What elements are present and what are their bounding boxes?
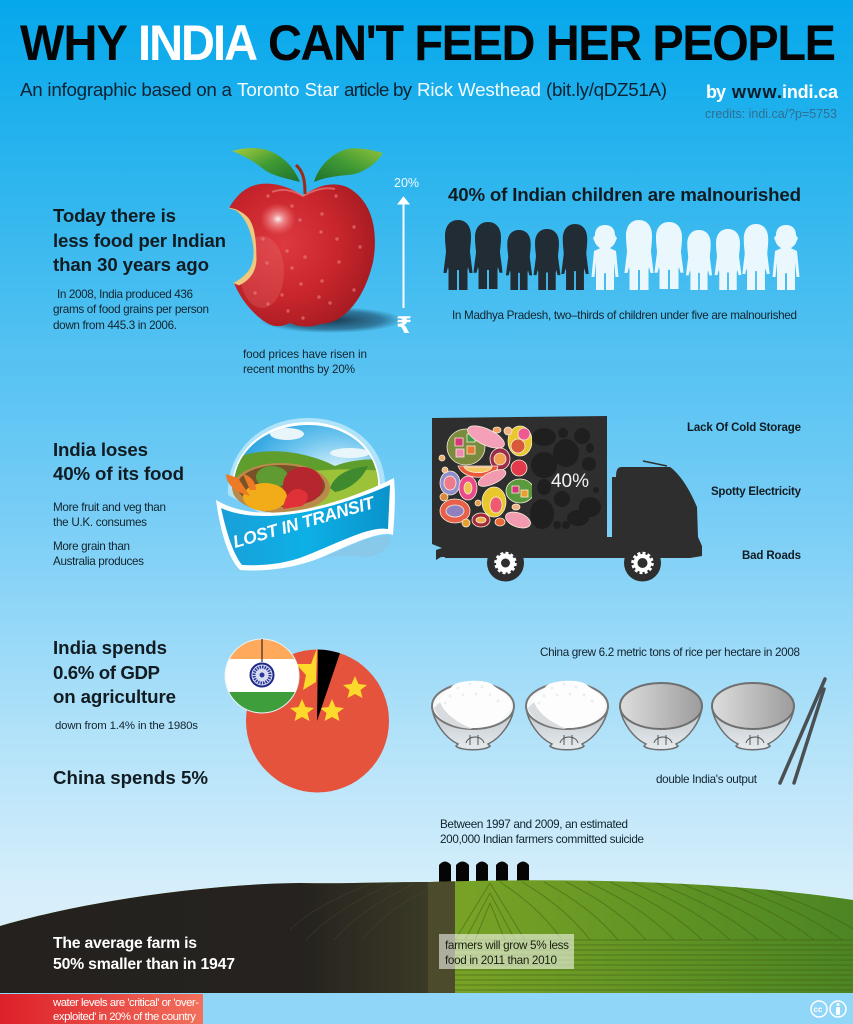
text: farmer suicides: Between 1997 and 2009, an estimated: [440, 818, 628, 831]
text: down from 1.4%: down from 1.4% in the 1980s: [55, 720, 198, 732]
text: Madhya Pradesh: In Madhya Pradesh, two–thirds of children under five are malnourished: [452, 309, 797, 322]
subtitle: [20, 79, 667, 100]
labels: causes: [687, 422, 802, 562]
icon: five grave markers: [439, 862, 529, 882]
byline: www.: [731, 82, 782, 102]
arrow: food price rise: ₹: [396, 313, 412, 339]
callout: water levels: exploited' in 20% of the country: [53, 1011, 196, 1023]
byline: indi.ca: [782, 82, 839, 102]
heading: GDP spending: India spends: [53, 637, 167, 658]
badge: lost in transit: LOST IN TRANSIT: [231, 492, 378, 552]
icon: empty bowl: [620, 683, 702, 750]
icon: bitten apple: [225, 148, 403, 333]
icon: chopsticks: [780, 679, 825, 783]
labels: causes: Lack Of Cold Storage: [687, 422, 801, 434]
text: farmer suicides: [440, 818, 644, 846]
fruit pattern: coloured half: [439, 421, 534, 531]
subtitle: Toronto Star: [237, 79, 339, 100]
text: losses compared: More fruit and veg than: [53, 501, 166, 514]
icon: rice bowl full: [526, 681, 608, 750]
icon: creative commons: [811, 1001, 846, 1017]
heading: less food: less food per Indian: [53, 230, 226, 251]
heading: GDP spending: [53, 637, 176, 707]
farmland hill: [0, 880, 853, 993]
text: losses compared: [53, 501, 166, 568]
text box: farmers will grow less: food in 2011 than 2010: [445, 954, 557, 967]
icon: empty bowl: [712, 683, 794, 750]
text: double output: double India's output: [656, 773, 758, 786]
heading: China spends: China spends 5%: [53, 767, 208, 788]
byline: by: [706, 82, 726, 102]
text: food grains: In 2008, India produced 436: [57, 288, 193, 301]
heading: India loses: India loses: [53, 439, 148, 460]
heading: GDP spending: on agriculture: [53, 686, 176, 707]
text: food prices: food prices have risen in: [243, 348, 367, 361]
heading: less food: than 30 years ago: [53, 254, 209, 275]
heading: less food: Today there is: [53, 205, 176, 226]
icon: creative commons: cc: [814, 1005, 823, 1014]
chart: China flag pie: [246, 648, 389, 792]
text: losses compared: Australia produces: [53, 555, 144, 568]
text: food grains: down from 445.3 in 2006.: [53, 319, 177, 332]
text: food prices: recent months by 20%: [243, 363, 355, 376]
text: food grains: grams of food grains per person: [53, 303, 209, 316]
labels: causes: Bad Roads: [742, 550, 801, 562]
callout: water levels: water levels are 'critical' or 'over-: [52, 997, 199, 1009]
text: losses compared: More grain than: [53, 540, 130, 553]
icon: rice bowl full: [432, 681, 514, 750]
subtitle: An infographic based on a: [20, 79, 233, 100]
title: CAN'T FEED HER PEOPLE: [268, 16, 836, 71]
text box: farmers will grow less: farmers will grow 5% less: [445, 939, 569, 952]
text box: farmers will grow less: [439, 934, 574, 969]
footer band: [0, 993, 853, 1024]
heading: GDP spending: 0.6% of GDP: [53, 662, 160, 683]
badge: lost in transit: [216, 418, 395, 570]
text: farmer suicides: 200,000 Indian farmers committed suicide: [440, 833, 644, 846]
byline: [706, 82, 839, 102]
text: average farm: [53, 935, 235, 973]
text: losses compared: the U.K. consumes: [53, 516, 147, 529]
heading: India loses: 40% of its food: [53, 463, 184, 484]
subtitle: (bit.ly/qDZ51A): [546, 79, 667, 100]
text: average farm: 50% smaller than in 1947: [53, 956, 235, 973]
callout: water levels: [0, 994, 203, 1024]
text: food grains: [53, 288, 209, 332]
title: [20, 16, 836, 71]
credits: credits: indi.ca/?p=5753: [705, 107, 837, 121]
title: INDIA: [138, 16, 258, 71]
fruit pattern: dark half: [530, 428, 601, 529]
icon: truck with food: 40%: [551, 471, 589, 492]
text: average farm: The average farm is: [53, 935, 197, 952]
arrow: food price rise: 20%: [394, 176, 419, 190]
text: food prices: [243, 348, 367, 376]
arrow: food price rise: [394, 176, 419, 339]
title: WHY: [20, 16, 128, 71]
subtitle: Rick Westhead: [417, 79, 541, 100]
heading: India loses: [53, 439, 184, 484]
heading: less food: [53, 205, 226, 275]
heading: malnourished: 40% of Indian children are malnourished: [448, 184, 801, 205]
pictogram: 12 children: [444, 220, 800, 290]
subtitle: article by: [344, 79, 413, 100]
icon: truck with food: [432, 416, 702, 582]
labels: causes: Spotty Electricity: [711, 486, 802, 498]
text: China rice: China grew 6.2 metric tons of rice per hectare in 2008: [540, 646, 800, 659]
chart: India flag pie: [224, 638, 300, 714]
